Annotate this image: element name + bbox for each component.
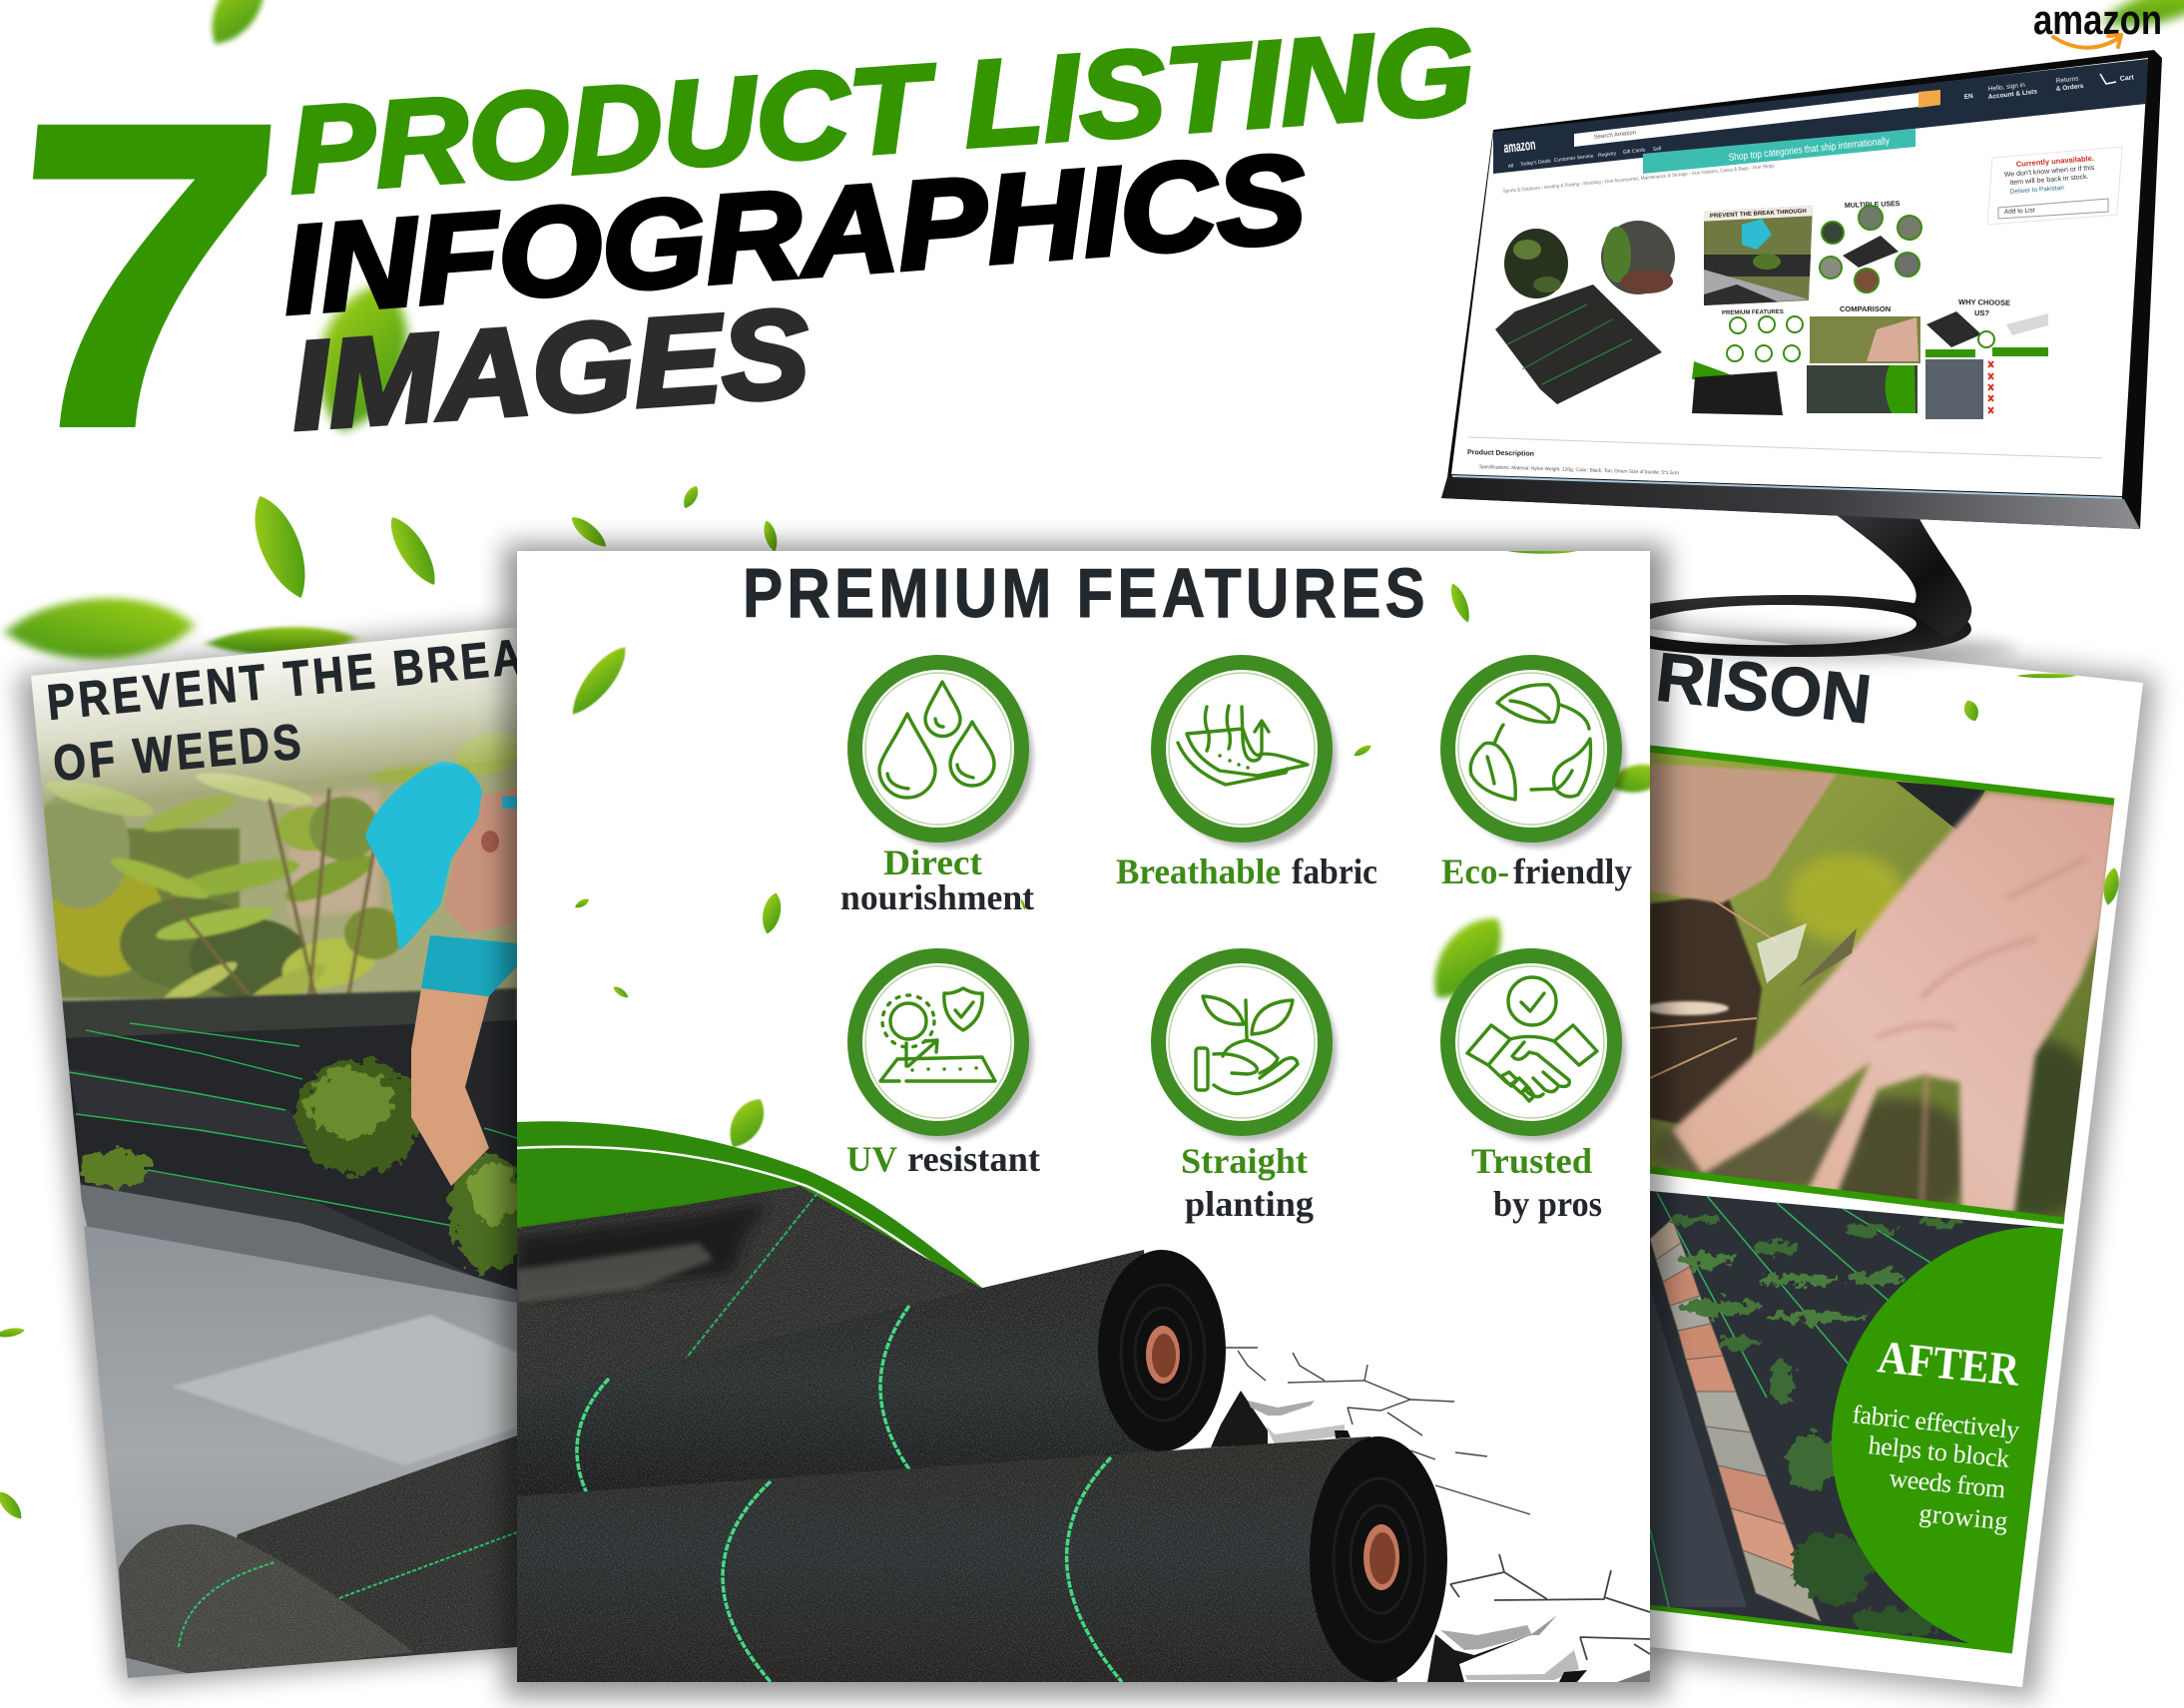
leaf: top edge blur bbox=[2016, 674, 2076, 678]
leaf on comparison card bbox=[1961, 698, 1981, 724]
knuckle shading bbox=[1877, 858, 2086, 1208]
gardener arm bbox=[411, 988, 489, 1186]
heading: of weeds: OF WEEDS bbox=[51, 713, 303, 792]
icon: breathable layers bbox=[1178, 706, 1308, 785]
leaf: left margin one bbox=[0, 1326, 25, 1340]
icon badge bbox=[857, 666, 1033, 848]
photo: roll green stitch bbox=[179, 1532, 517, 1647]
screen: availability box: We don't know when or if this bbox=[2004, 165, 2095, 179]
screen: thumbnail comparison: COMPARISON bbox=[1840, 304, 1891, 313]
gardener glove bbox=[497, 1028, 517, 1078]
photo: black fabric bbox=[65, 1020, 517, 1298]
leaf: on nourishment word bbox=[1020, 898, 1026, 910]
feature: trusted by pros: by pros bbox=[1493, 1184, 1602, 1224]
photo top border bbox=[1650, 749, 2114, 802]
leaf: blurred behind left card bbox=[207, 625, 356, 657]
fabric stitch bbox=[686, 1193, 818, 1359]
leaf: sharp left bbox=[243, 489, 318, 605]
screen: nav labels bbox=[1503, 74, 2135, 170]
callout text: growing bbox=[1917, 1498, 2009, 1536]
background leaf: top right bbox=[2099, 0, 2184, 37]
panel: premium features bbox=[517, 548, 1669, 1682]
fabric left strip bbox=[1650, 1288, 1747, 1607]
panel: prevent the break through of weeds bbox=[20, 599, 529, 1687]
monitor chin bbox=[1441, 474, 2140, 529]
photo: gravel strip bbox=[80, 1184, 517, 1303]
callout text bbox=[1851, 1400, 2020, 1536]
screen: nav labels: Account & Lists bbox=[1987, 88, 2038, 101]
screen: nav labels: Sell bbox=[1653, 146, 1662, 153]
screen: thumbnail why choose us bbox=[1925, 297, 2048, 419]
callout: after bbox=[1832, 1223, 2068, 1657]
leaf: blurred edge bbox=[1605, 760, 1669, 798]
screen: search button bbox=[1918, 90, 1940, 108]
screen: nav labels: EN bbox=[1963, 93, 1974, 101]
panel: comparison bbox=[1645, 629, 2143, 1687]
monitor stand bbox=[1597, 513, 2016, 663]
leaf: tiny top bbox=[680, 483, 702, 511]
feature: uv resistant: resistant bbox=[907, 1139, 1040, 1179]
sleeve bbox=[1896, 782, 1986, 834]
photo: hands in soil bbox=[1645, 744, 2121, 1223]
icon: sun shield fabric bbox=[880, 988, 995, 1081]
front roll stitches bbox=[1067, 1457, 1122, 1682]
screen: product gallery bbox=[1495, 221, 1675, 404]
leaf: small bbox=[1353, 743, 1372, 759]
screen: nav labels: Gift Cards bbox=[1623, 147, 1646, 156]
back roll stitches bbox=[880, 1306, 909, 1469]
icon: water drops bbox=[879, 682, 994, 798]
photo: gardener bbox=[365, 762, 517, 1186]
callout heading: after: AFTER bbox=[1876, 1331, 2022, 1396]
screen: availability box: Add to List bbox=[2004, 207, 2035, 216]
cracked wall front bbox=[1427, 1554, 1650, 1682]
fabric sheen bbox=[517, 1203, 769, 1298]
screen: banner text: Shop top categories that ship internationally bbox=[1728, 135, 1891, 163]
screen: nav labels: Today's Deals bbox=[1520, 158, 1551, 168]
roll: back roll bbox=[517, 1250, 1226, 1517]
leaf: right margin blur bbox=[2101, 866, 2121, 906]
roll: front roll bbox=[517, 1436, 1447, 1682]
back roll core bbox=[1146, 1326, 1180, 1384]
plants bbox=[1671, 1214, 1963, 1636]
heading: prevent the break: PREVENT THE BREA bbox=[45, 628, 525, 731]
photo: paving bbox=[84, 1226, 517, 1687]
panel: main card shadow bbox=[504, 544, 1667, 1697]
photo: stone edge bbox=[60, 988, 517, 1044]
gardener cap bbox=[365, 762, 482, 950]
dried grass bbox=[1650, 858, 1787, 1078]
photo middle border bbox=[1650, 1170, 2064, 1221]
right hand bbox=[1672, 793, 2116, 1213]
screen: nav labels: Returns bbox=[2055, 75, 2080, 85]
screen: amazon nav bar bbox=[1493, 59, 2148, 174]
photo: fabric green lines bbox=[69, 1023, 517, 1227]
decorative leaves above the cards bbox=[0, 483, 781, 1523]
screen: nav labels: & Orders bbox=[2055, 83, 2084, 93]
leaf: top edge bbox=[1507, 548, 1577, 554]
leaf: sharp second bbox=[381, 511, 445, 591]
leaf: tall bbox=[759, 891, 785, 935]
photo: fabric folds bbox=[69, 1068, 309, 1148]
background leaf: blurred behind title bbox=[300, 272, 424, 443]
screen: thumbnail why choose us: US? bbox=[1974, 308, 1990, 317]
screen: nav labels: amazon bbox=[1503, 136, 1536, 157]
screen: nav labels: Registry bbox=[1598, 151, 1617, 159]
feature: direct nourishment: nourishment bbox=[840, 877, 1034, 917]
icon badge bbox=[857, 959, 1033, 1141]
label: Trusted bbox=[1471, 1141, 1592, 1181]
feature: uv resistant bbox=[846, 956, 1040, 1179]
feature: trusted by pros bbox=[1447, 956, 1626, 1224]
screen: thumbnail comparison bbox=[1807, 304, 1920, 413]
stand base ring bbox=[1597, 595, 1971, 657]
screen: nav labels: Search Amazon bbox=[1594, 130, 1636, 141]
label: Direct bbox=[883, 843, 982, 882]
feature: breathable fabric bbox=[1116, 663, 1377, 891]
monitor bbox=[1441, 50, 2162, 529]
callout text: fabric effectively bbox=[1851, 1400, 2020, 1444]
card background bbox=[1650, 629, 2143, 1687]
callout text: weeds from bbox=[1888, 1463, 2007, 1503]
screen: thumbnail premium features bbox=[1692, 309, 1803, 415]
leaf: large left bbox=[563, 640, 635, 722]
feature: direct nourishment bbox=[840, 663, 1034, 917]
leaf: tiny two bbox=[612, 984, 630, 1000]
screen: availability box: Deliver to Pakistan bbox=[2010, 185, 2065, 196]
screen: availability box bbox=[1987, 147, 2122, 225]
feature: eco-friendly: friendly bbox=[1513, 852, 1632, 891]
screen: nav labels: All bbox=[1508, 163, 1514, 170]
leaf: small mid bbox=[567, 512, 611, 552]
screen: breadcrumb: Sports & Outdoors › Hunting & Fishing › Shooting › Gun Accessories, Maintenance & Storage › Gun Holsters, Cases & Bags › Gun Slings bbox=[1503, 163, 1775, 195]
green swoosh bbox=[517, 1121, 988, 1293]
amazon logo bbox=[2033, 0, 2162, 48]
photo: fabric roll bbox=[119, 1435, 517, 1687]
gardener head bbox=[444, 789, 517, 933]
heading: premium features: PREMIUM FEATURES bbox=[743, 554, 1425, 632]
icon badge bbox=[1450, 666, 1626, 848]
label: Straight bbox=[1181, 1141, 1308, 1181]
screen: thumbnail premium features: PREMIUM FEATURES bbox=[1722, 309, 1784, 316]
icon badge bbox=[1450, 959, 1626, 1141]
icon: seedling in hand bbox=[1196, 996, 1298, 1094]
green fabric lines bbox=[1650, 1193, 1971, 1607]
swoosh white line bbox=[517, 1147, 970, 1290]
leaf: tiny one bbox=[573, 896, 591, 910]
soil bbox=[1650, 893, 1762, 1128]
feature: straight planting bbox=[1158, 956, 1337, 1224]
feature: eco-friendly bbox=[1441, 663, 1632, 891]
label: UV bbox=[846, 1139, 897, 1179]
screen: product description: Product Description bbox=[1467, 449, 1534, 458]
back roll end cap bbox=[1098, 1250, 1226, 1451]
photo: garden backdrop bbox=[20, 619, 519, 1038]
title line: product listing: PRODUCT LISTING bbox=[284, 2, 1478, 219]
stand shadow bbox=[1677, 635, 2016, 663]
photo: beige wall bbox=[289, 789, 379, 918]
photo: mulch fabric and plants bbox=[1647, 1188, 2068, 1657]
bricks bbox=[1650, 1219, 1821, 1621]
leaf: small right bbox=[761, 519, 781, 553]
leaf: left margin two bbox=[0, 1487, 26, 1523]
screen: search field bbox=[1574, 93, 1918, 147]
title bbox=[0, 2, 1478, 516]
screen: product description bbox=[1467, 437, 2102, 476]
screen: white page bbox=[1451, 58, 2148, 496]
photo: shrubs bbox=[78, 1059, 529, 1273]
monitor chin highlight bbox=[1452, 476, 2122, 498]
screen: availability box: item will be back in stock. bbox=[2010, 174, 2089, 187]
screen: product description: Specifications: Material: Nylon Weight: 120g, Color: Black, Tan, Green Size of buckle: 5*1.5cm bbox=[1479, 464, 1679, 476]
left hand bbox=[1650, 764, 1837, 903]
title line: images: IMAGES bbox=[287, 284, 814, 456]
screen: nav labels: Hello, sign in bbox=[1987, 82, 2026, 93]
title line: infographics: INFOGRAPHICS bbox=[278, 129, 1310, 340]
icon badge bbox=[1161, 959, 1337, 1141]
icon: handshake and check bbox=[1467, 977, 1597, 1101]
panel: right card shadow bbox=[1647, 624, 2156, 1699]
gardener shirt bbox=[421, 935, 517, 996]
icon: recycled leaves bbox=[1470, 685, 1591, 800]
screen: thumbnail prevent: PREVENT THE BREAK THROUGH bbox=[1710, 209, 1807, 220]
icon badge bbox=[1161, 666, 1337, 848]
card background bbox=[517, 551, 1650, 1682]
fabric sheet bbox=[517, 1186, 998, 1497]
screen: thumbnail prevent bbox=[1697, 205, 1817, 309]
screen: thumbnail why choose us: WHY CHOOSE bbox=[1958, 297, 2010, 307]
screen: nav labels: Customer Service bbox=[1554, 154, 1594, 164]
background leaf: top left bbox=[198, 0, 277, 55]
screen: thumbnail multiple uses bbox=[1820, 201, 1921, 292]
feature: breathable fabric: fabric bbox=[1292, 852, 1377, 891]
monitor bezel bbox=[1441, 50, 2162, 529]
front roll core bbox=[1364, 1524, 1399, 1590]
panel: left card shadow bbox=[18, 624, 517, 1687]
amazon smile bbox=[2053, 35, 2121, 48]
photo: foliage bbox=[44, 732, 517, 1000]
leaf: behind swoosh bbox=[721, 1092, 773, 1154]
screen: availability box: Currently unavailable. bbox=[2015, 154, 2094, 169]
heading: comparison: RISON bbox=[1652, 638, 1875, 739]
leaf: large blurred left bbox=[4, 595, 196, 663]
photo: white fade at top bbox=[31, 627, 517, 803]
front roll end cap bbox=[1310, 1436, 1447, 1682]
screen: nav labels: Cart bbox=[2119, 74, 2135, 83]
photo bottom border bbox=[1650, 1607, 2012, 1651]
stand neck bbox=[1834, 513, 1971, 639]
callout text: helps to block bbox=[1867, 1430, 2011, 1473]
label: Breathable bbox=[1116, 852, 1281, 891]
leaf: blurred right bbox=[1417, 903, 1517, 1013]
screen: teal banner bbox=[1643, 129, 1915, 174]
cracked wall back bbox=[1211, 1348, 1530, 1514]
screen: thumbnail multiple uses: MULTIPLE USES bbox=[1845, 201, 1901, 210]
photo: pale paving slab bbox=[172, 1315, 517, 1465]
label: Eco- bbox=[1441, 852, 1509, 891]
leaf: beside heading bbox=[1446, 581, 1474, 625]
feature: straight planting: planting bbox=[1185, 1184, 1314, 1224]
